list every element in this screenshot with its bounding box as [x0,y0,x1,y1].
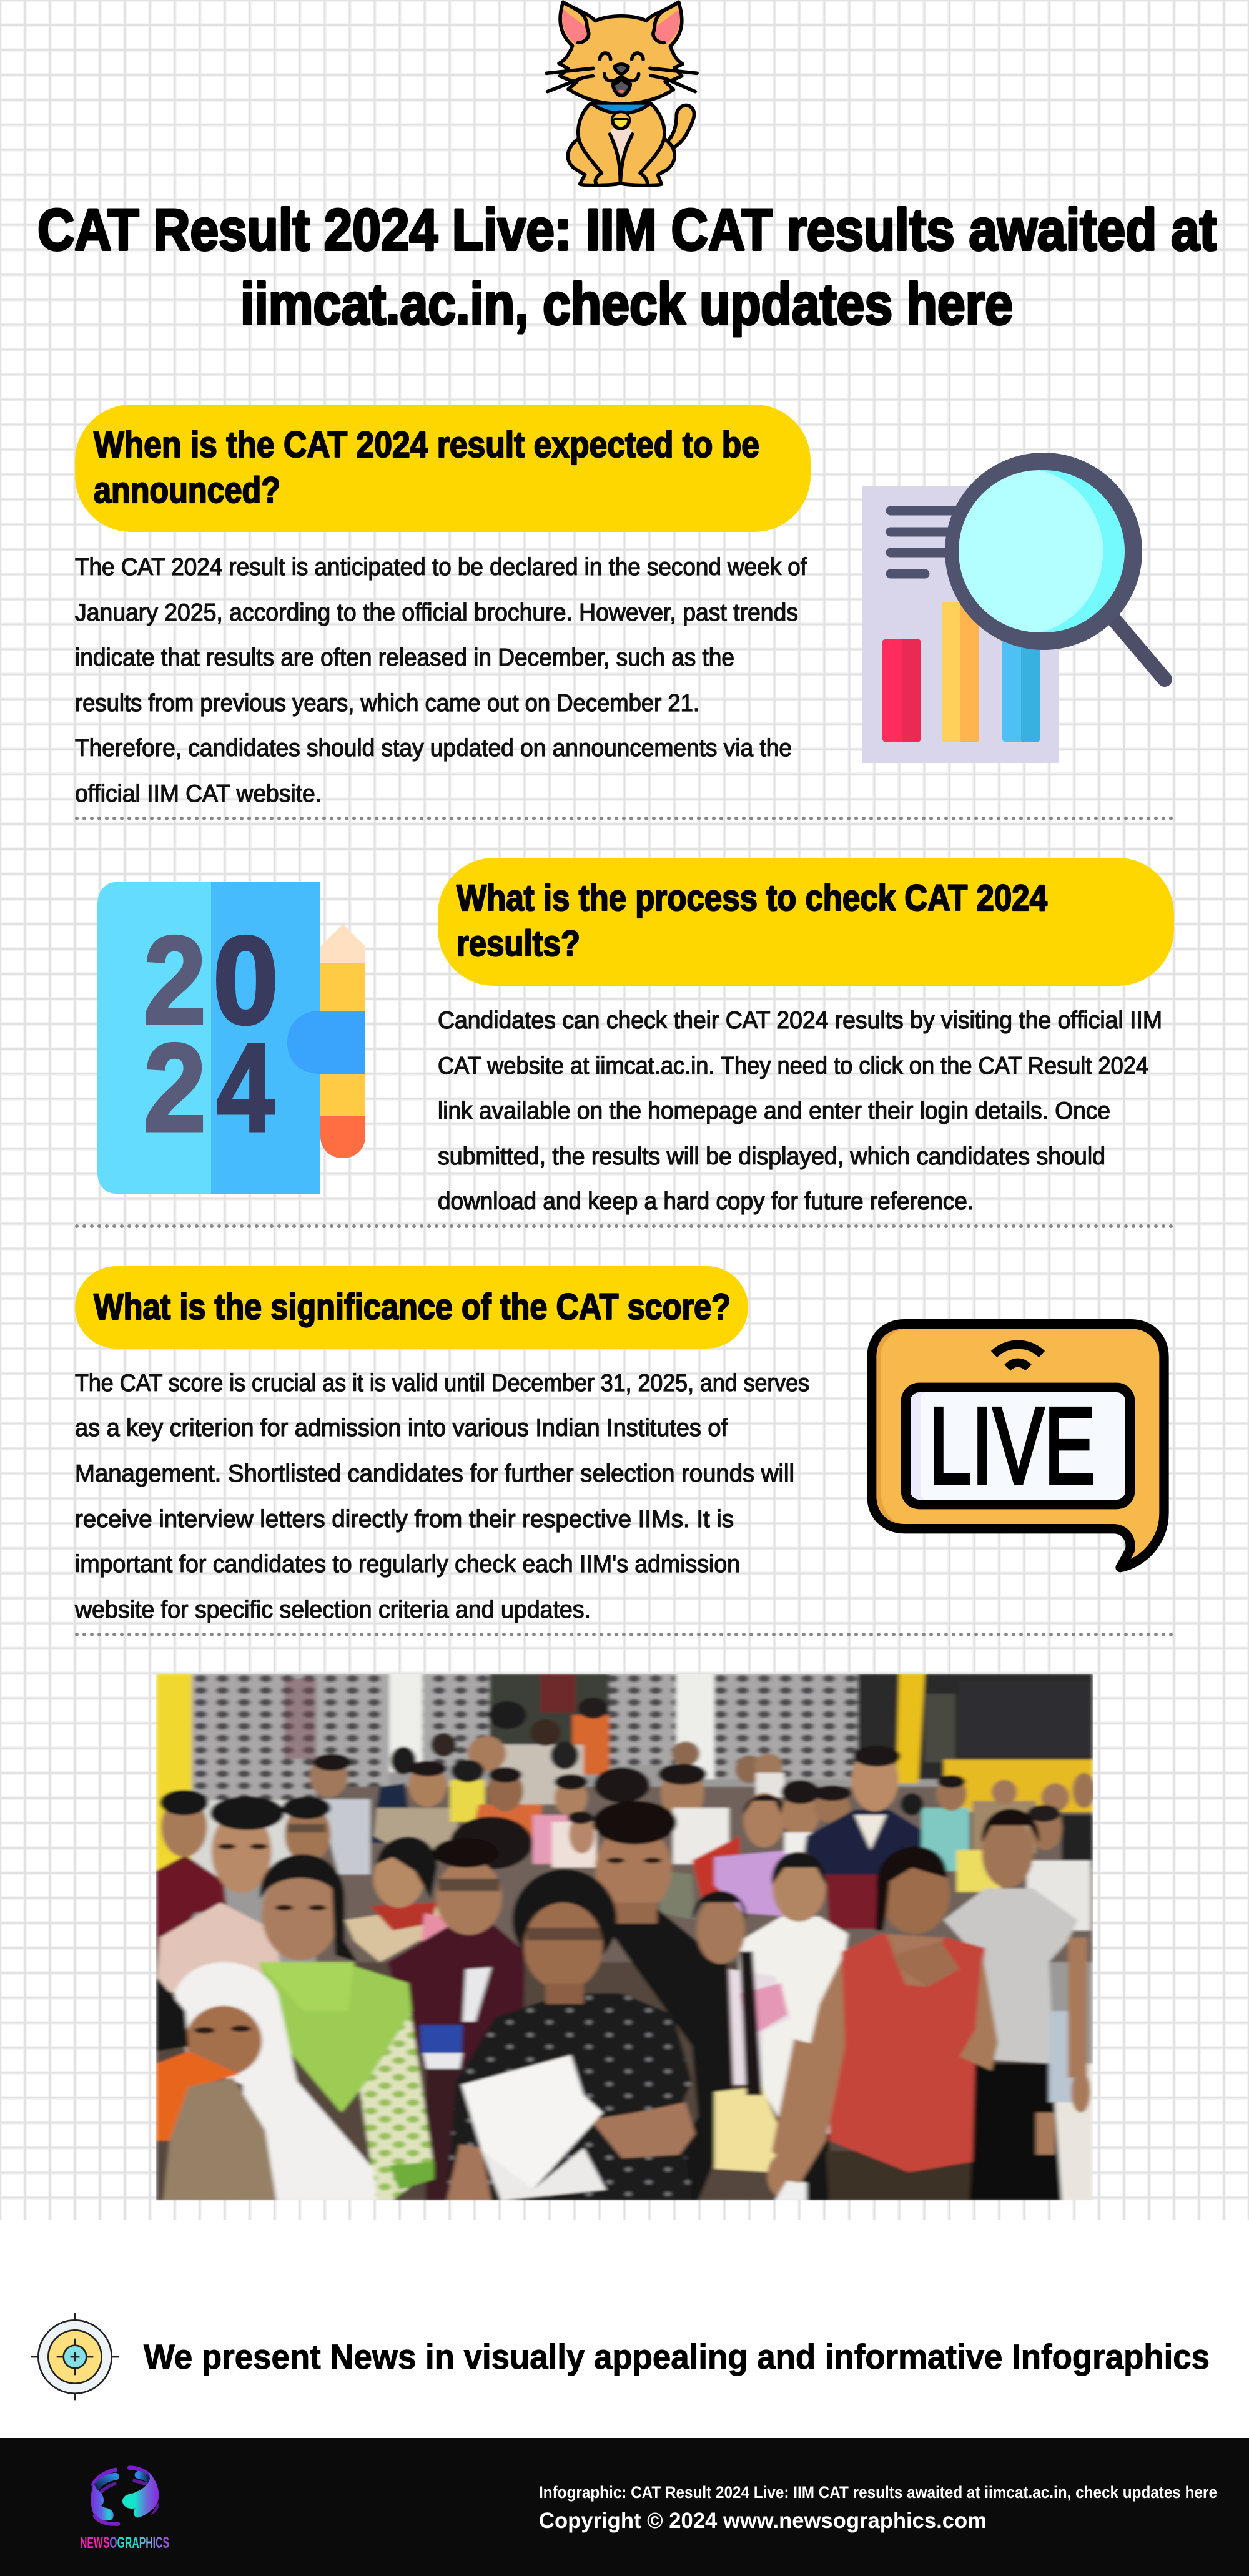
panel: when is the result expected [75,405,1165,807]
scarf girl [345,1906,450,1962]
icon: 2024 calendar with pencil: 4 [217,1018,274,1158]
body text 1: The CAT 2024 result is anticipated to be declared in the second week of [75,554,807,581]
centre woman [447,1993,692,2200]
footer band [0,2438,1249,2576]
grey tee girl [966,2063,1093,2200]
body text 1: January 2025, according to the official brochure. However, past trends [75,599,798,626]
heading pill 3 [75,1266,748,1349]
icon: 2024 calendar with pencil: 2 [144,911,206,1050]
body text 2 [438,1007,1162,1215]
panel: significance of the score [74,1266,1164,1623]
icon: LIVE speech bubble [872,1324,1164,1568]
back crowd [316,1787,944,1962]
body text 3: receive interview letters directly from their respective IIMs. It is [75,1506,734,1533]
red top woman [826,2151,972,2200]
hair behind [450,1817,533,1869]
heading pill 1: When is the CAT 2024 result expected to be [94,425,759,465]
body text 1: official IIM CAT website. [75,780,322,807]
white band behind tagline [0,2220,1249,2438]
tall man [601,1906,733,2120]
heading pill 3: What is the significance of the CAT score? [94,1287,731,1327]
tagline row [31,2313,1210,2400]
body text 1: indicate that results are often released in December, such as the [75,644,734,671]
icon: 2024 calendar with pencil: 2 [144,1018,206,1158]
heading pill 2: results? [457,923,580,964]
photo: crowd of students (illustrated) [156,1674,1095,2200]
body text 3: website for specific selection criteria and updates. [74,1596,591,1623]
title [37,197,1217,337]
body text 2: CAT website at iimcat.ac.in. They need to click on the CAT Result 2024 [438,1053,1148,1079]
logo wordmark: NEWSOGRAPHICS [80,2534,169,2552]
title: iimcat.ac.in, check updates here [240,271,1013,337]
icon: magnifier over bar chart document [862,453,1165,763]
white shirt woman [737,1917,848,2134]
body text 3: as a key criterion for admission into various Indian Institutes of [75,1415,728,1442]
icon: 2024 calendar with pencil: 0 [213,911,279,1050]
body text 3: important for candidates to regularly check each IIM's admission [75,1551,740,1578]
logo: newsographics globe [91,2468,159,2524]
divider 2 [77,1224,1173,1228]
icon: target [31,2313,119,2400]
divider 1 [77,817,1173,820]
glasses man [387,1925,525,2069]
body text 1 [75,554,807,807]
green dupatta woman [357,2012,437,2200]
icon: 2024 calendar with pencil [97,882,365,1194]
heading pill 2 [438,858,1174,986]
body text 1: Therefore, candidates should stay updated on announcements via the [75,735,792,762]
left men [156,1855,227,1962]
heading pill 1 [75,405,811,532]
body text 2: submitted, the results will be displayed, which candidates should [438,1143,1105,1170]
body text 1: results from previous years, which came out on December 21. [75,690,699,717]
icon: LIVE speech bubble: LIVE [929,1385,1095,1507]
tagline text: We present News in visually appealing and informative Infographics [144,2337,1210,2376]
body text 3 [74,1370,809,1623]
icon: smiling cat mascot [546,2,697,185]
heading pill 2: What is the process to check CAT 2024 [457,878,1047,918]
body text 2: Candidates can check their CAT 2024 results by visiting the official IIM [438,1007,1162,1034]
body text 3: Management. Shortlisted candidates for further selection rounds will [75,1460,794,1487]
panel: process to check results [97,858,1174,1215]
body text 2: link available on the homepage and enter their login details. Once [438,1098,1110,1124]
body text 2: download and keep a hard copy for future reference. [438,1188,974,1215]
body text 3: The CAT score is crucial as it is valid until December 31, 2025, and serves [75,1370,809,1397]
copyright line: Copyright © 2024 www.newsographics.com [539,2509,987,2533]
divider 3 [77,1633,1173,1636]
heading pill 1: announced? [94,470,280,511]
braid girl [729,1969,791,2085]
hijab woman [175,1962,377,2200]
